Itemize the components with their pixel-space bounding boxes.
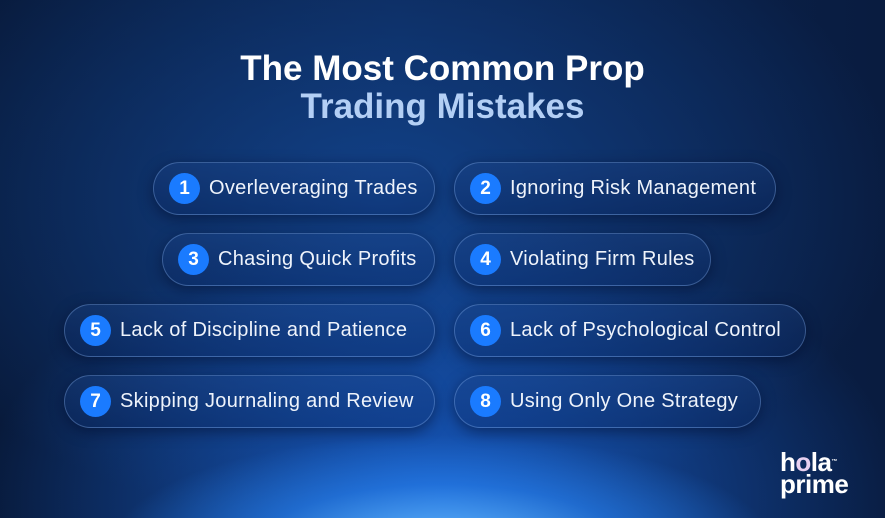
pill 6 (454, 304, 806, 357)
pill 8: Using Only One Strategy (510, 390, 738, 412)
pill 4: Violating Firm Rules (510, 248, 695, 270)
pill 7 (64, 375, 435, 428)
pill 3 (162, 233, 435, 286)
pill 2: Ignoring Risk Management (510, 177, 756, 199)
pill 3: Chasing Quick Profits (218, 248, 417, 270)
pill 1: Overleveraging Trades (209, 177, 418, 199)
pill 7: Skipping Journaling and Review (120, 390, 414, 412)
logo: hola™ (780, 447, 837, 477)
pill 4 (454, 233, 711, 286)
pill 4: 4 (480, 249, 491, 270)
pill 5: Lack of Discipline and Patience (120, 319, 407, 341)
pill 8: 8 (480, 391, 491, 412)
pill 5: 5 (90, 320, 101, 341)
pill 7: 7 (90, 391, 101, 412)
pill 6: 6 (480, 320, 491, 341)
title (240, 49, 645, 126)
pill 1 (153, 162, 435, 215)
pill 8 (454, 375, 761, 428)
pill 3: 3 (188, 249, 199, 270)
pill 1: 1 (179, 178, 190, 199)
logo (780, 447, 848, 499)
title: The Most Common Prop (240, 49, 645, 88)
pill 2 (454, 162, 776, 215)
pill 5 (64, 304, 435, 357)
title: Trading Mistakes (300, 87, 584, 126)
pill 6: Lack of Psychological Control (510, 319, 781, 341)
logo: prime (780, 469, 848, 499)
pill 2: 2 (480, 178, 491, 199)
